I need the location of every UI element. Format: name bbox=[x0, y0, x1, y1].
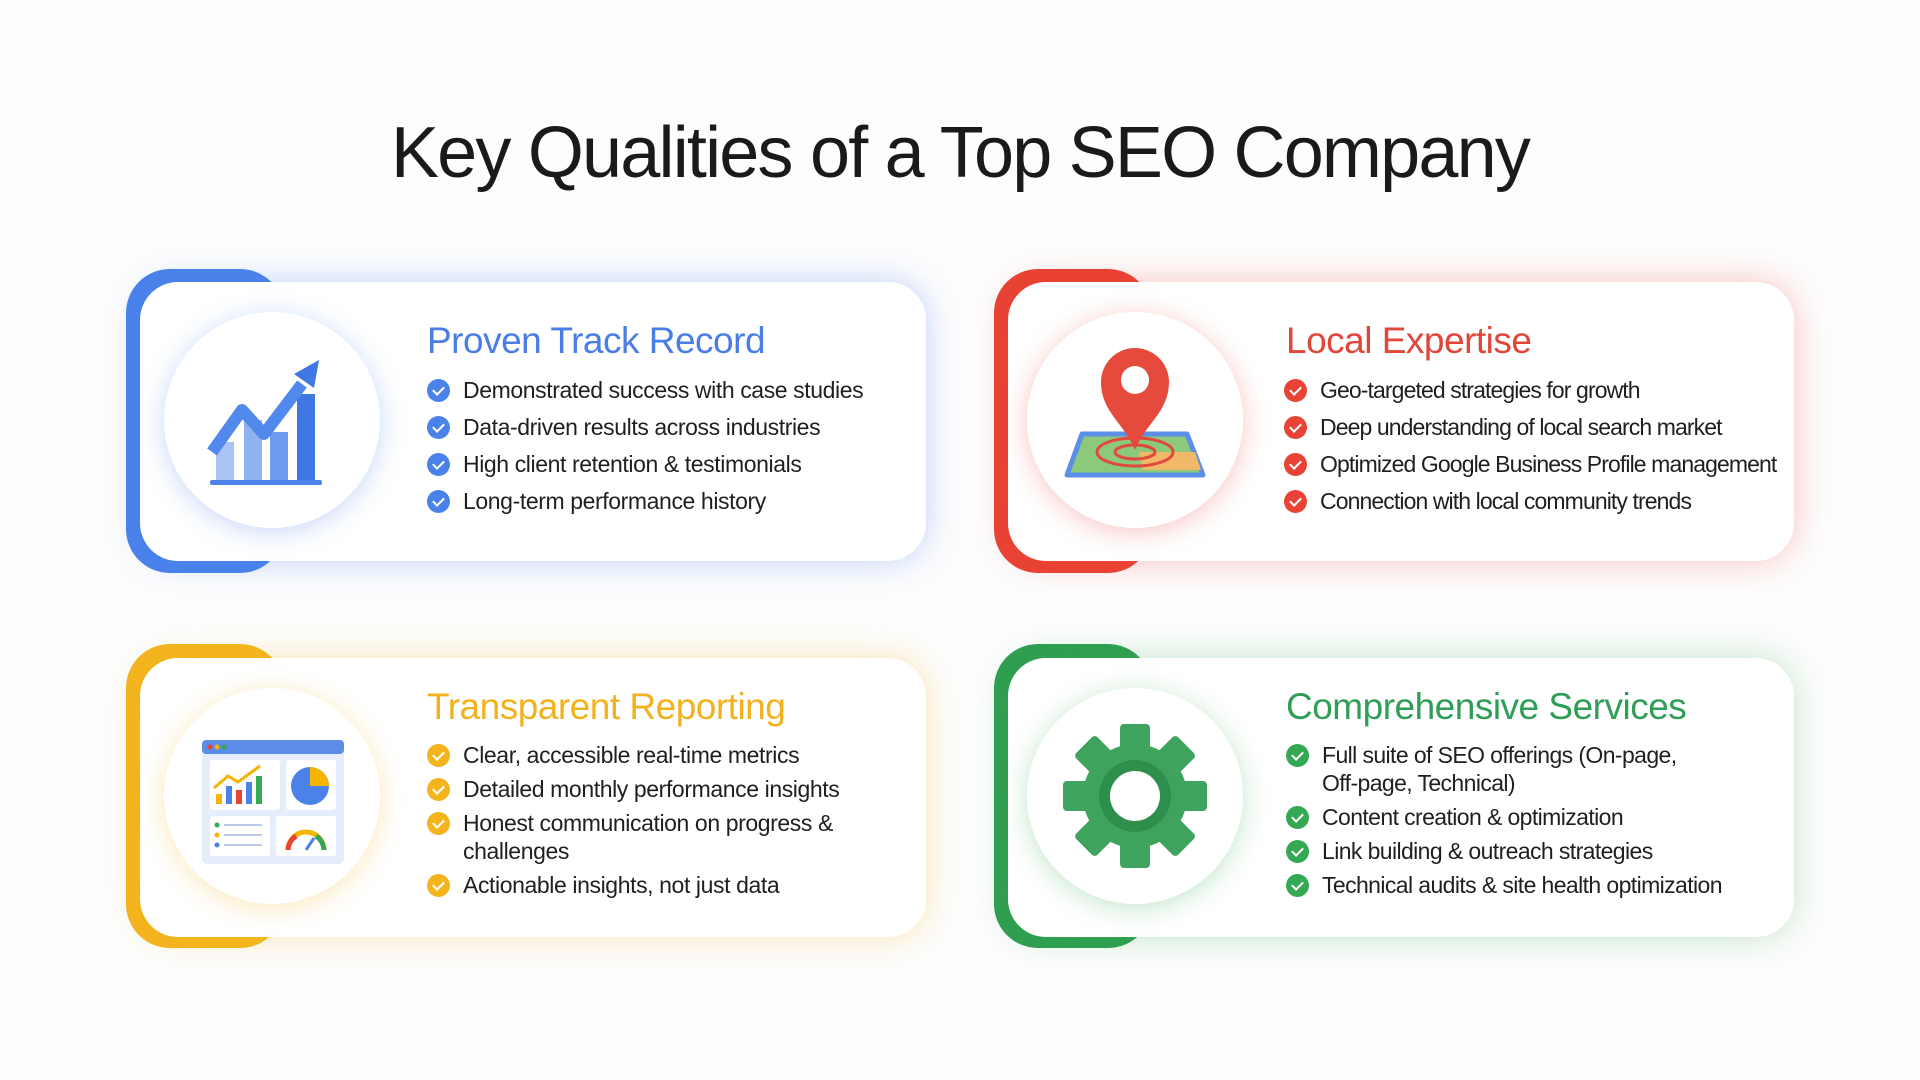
heading: Local Expertise bbox=[1286, 320, 1531, 361]
bullets bbox=[427, 377, 863, 514]
panel: comprehensive services bbox=[990, 640, 1812, 955]
heading: Comprehensive Services bbox=[1286, 686, 1686, 727]
bullets: challenges bbox=[463, 838, 569, 864]
bullets bbox=[427, 742, 839, 898]
bullets: Geo-targeted strategies for growth bbox=[1320, 377, 1640, 403]
panel: proven track record bbox=[122, 264, 944, 580]
bracket red bbox=[994, 269, 1152, 573]
panel: local expertise bbox=[990, 264, 1812, 580]
bullets: Optimized Google Business Profile management bbox=[1320, 451, 1776, 477]
bullets: Connection with local community trends bbox=[1320, 488, 1691, 514]
icon: dashboard bbox=[164, 688, 380, 904]
heading: Transparent Reporting bbox=[427, 686, 785, 727]
bullets: Off-page, Technical) bbox=[1322, 770, 1515, 796]
bullets: Data-driven results across industries bbox=[463, 414, 820, 440]
bullets: Link building & outreach strategies bbox=[1322, 838, 1653, 864]
bracket green bbox=[994, 644, 1152, 948]
card bbox=[140, 658, 926, 937]
bullets: Clear, accessible real-time metrics bbox=[463, 742, 799, 768]
heading: Proven Track Record bbox=[427, 320, 765, 361]
bullets: Technical audits & site health optimization bbox=[1322, 872, 1722, 898]
bracket yellow bbox=[126, 644, 284, 948]
bullets: Demonstrated success with case studies bbox=[463, 377, 863, 403]
bullets: Full suite of SEO offerings (On-page, bbox=[1322, 742, 1677, 768]
panel: transparent reporting bbox=[120, 638, 946, 956]
bullets: Deep understanding of local search market bbox=[1320, 414, 1722, 440]
bullets: Long-term performance history bbox=[463, 488, 766, 514]
icon: gear bbox=[1027, 688, 1243, 904]
bullets bbox=[1286, 742, 1722, 898]
bullets: Honest communication on progress & bbox=[463, 810, 833, 836]
card bbox=[1008, 658, 1794, 937]
icon: growth chart bbox=[164, 312, 380, 528]
bullets: High client retention & testimonials bbox=[463, 451, 801, 477]
bullets: Detailed monthly performance insights bbox=[463, 776, 839, 802]
title: Key Qualities of a Top SEO Company bbox=[391, 113, 1529, 193]
card bbox=[1008, 282, 1794, 561]
bullets bbox=[1284, 377, 1778, 514]
bullets: Actionable insights, not just data bbox=[463, 872, 779, 898]
card bbox=[140, 282, 926, 561]
icon: map pin bbox=[1027, 312, 1243, 528]
bullets: Content creation & optimization bbox=[1322, 804, 1623, 830]
bracket blue bbox=[126, 269, 284, 573]
